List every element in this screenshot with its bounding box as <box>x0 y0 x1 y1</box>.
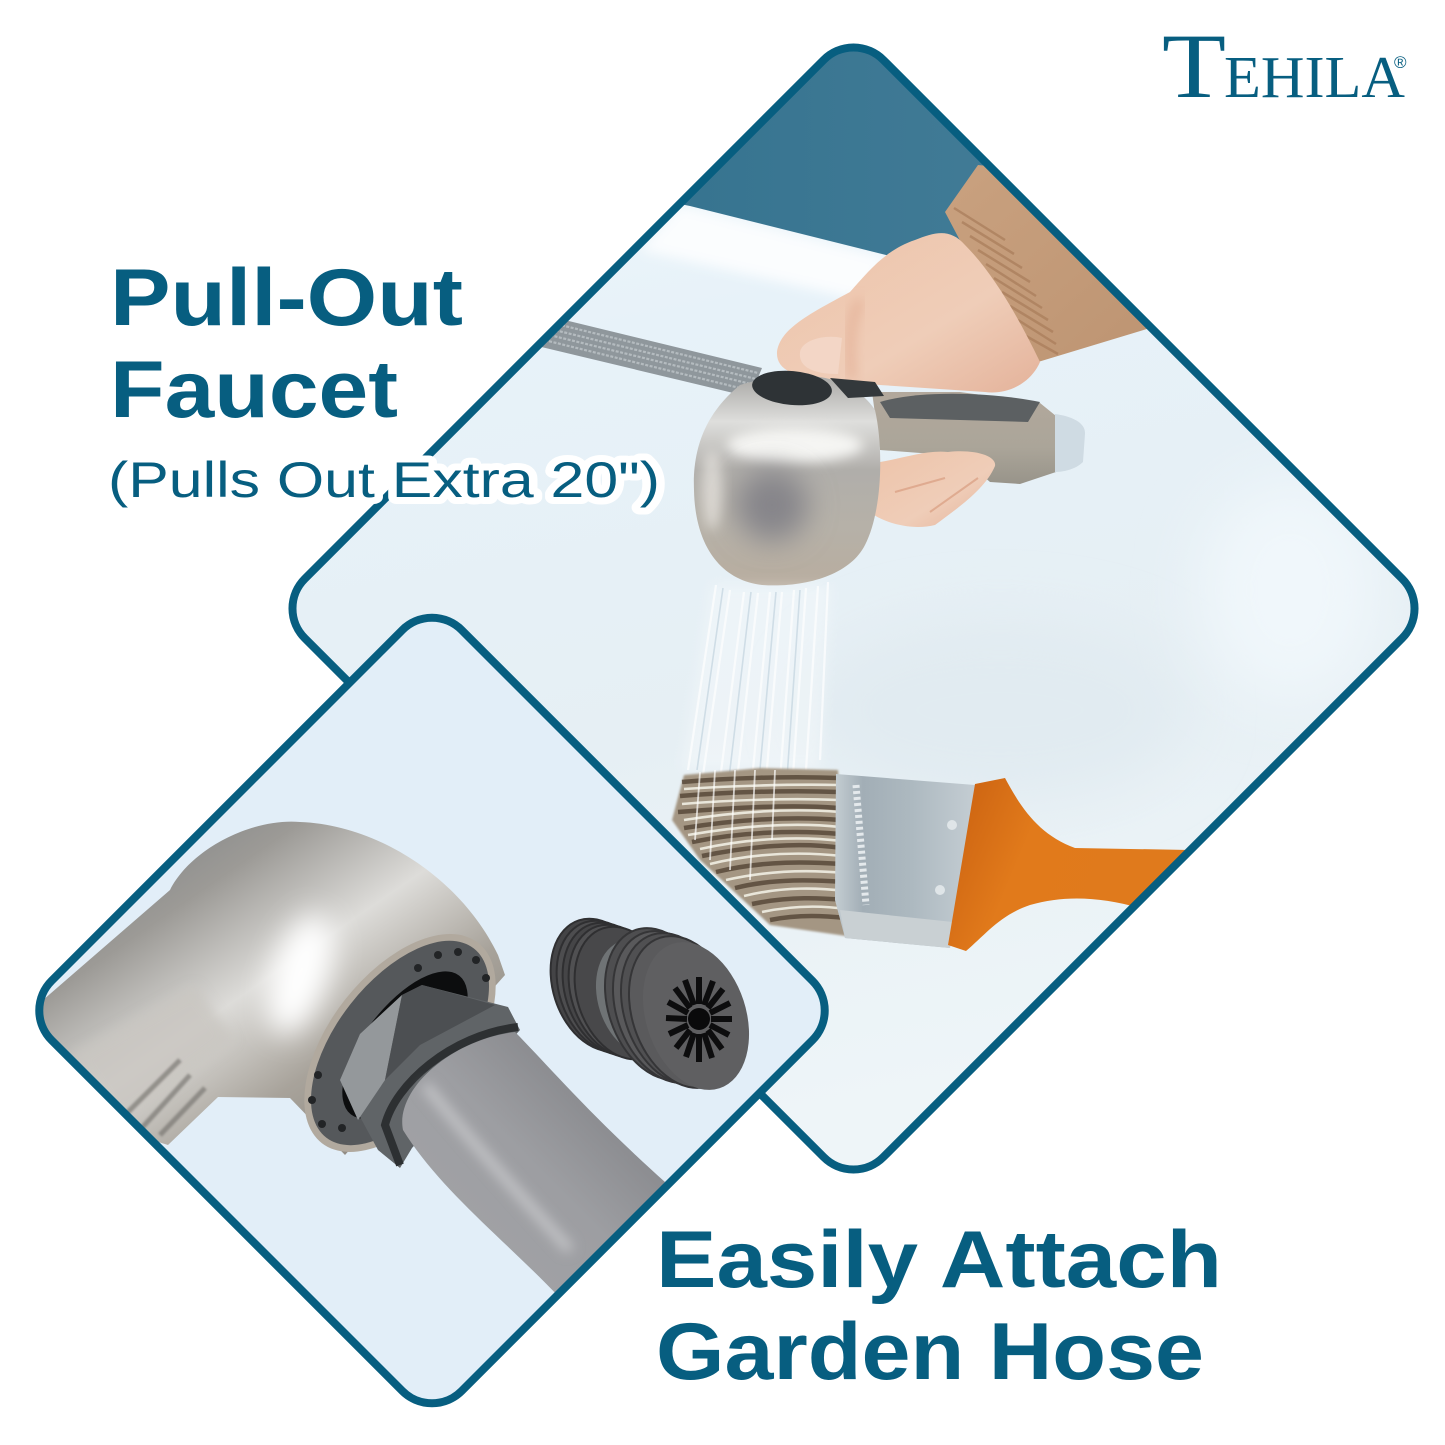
icon: sprayer body and neck <box>20 822 505 1155</box>
icon: aerator adapter <box>550 918 750 1090</box>
icon: paint brush <box>672 768 1190 951</box>
panel: garden hose adapter photo diamond <box>20 600 842 1421</box>
icon: water spray <box>682 582 830 780</box>
icon: sweater cuff <box>945 165 1160 362</box>
icon: grey hose connector tube <box>402 1032 665 1298</box>
icon: sprayer face rim <box>304 934 496 1152</box>
icon: braided hose <box>542 321 762 392</box>
heading: Easily Attach Garden Hose: Garden Hose <box>656 1307 1204 1397</box>
logo: Tehila <box>1162 15 1407 117</box>
icon: hex nut <box>340 985 520 1168</box>
heading: Pull-Out Faucet: Pull-Out <box>110 253 463 343</box>
brush handle <box>948 778 1190 951</box>
brush bristles <box>672 768 846 936</box>
heading: Easily Attach Garden Hose <box>656 1215 1222 1397</box>
front tier <box>604 927 702 1089</box>
threaded rear tier <box>550 918 632 1060</box>
aerator face <box>692 943 750 1090</box>
icon: hand on sprayer <box>777 233 1040 393</box>
tube highlight <box>425 1085 570 1250</box>
heading: Pull-Out Faucet: Faucet <box>110 345 398 435</box>
heading: Pull-Out Faucet <box>110 253 463 435</box>
wall behind sink <box>684 52 984 256</box>
aerator radial slots <box>666 977 732 1062</box>
groove <box>596 943 620 1044</box>
icon: sprayer head <box>694 368 884 585</box>
logo: Tehila: EHILA <box>1224 44 1405 110</box>
logo: Tehila: ® <box>1394 53 1407 72</box>
panel: pull-out spray photo diamond <box>275 30 1432 1187</box>
icon: sprayer handle <box>872 392 1085 484</box>
logo: Tehila: T <box>1162 15 1226 117</box>
icon: lower fingers <box>874 451 995 527</box>
brush ferrule <box>835 774 975 948</box>
heading: Easily Attach Garden Hose: Easily Attach <box>656 1215 1222 1305</box>
subheading: pulls out extra 20 inches: (Pulls Out Extra 20") <box>108 452 660 508</box>
